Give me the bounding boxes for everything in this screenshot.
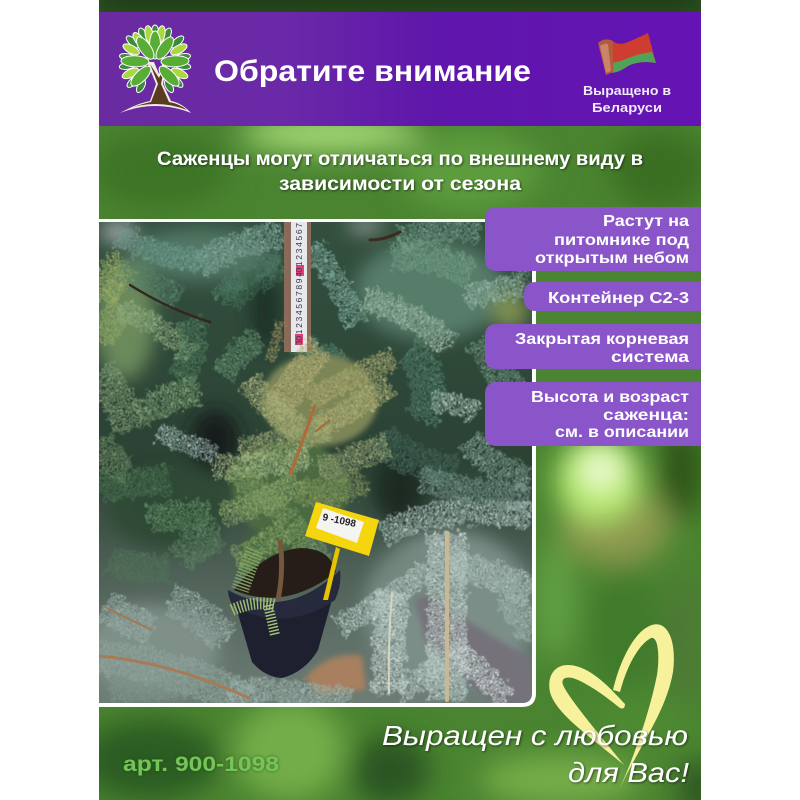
title: Обратите внимание — [214, 55, 531, 88]
branch stems — [99, 232, 447, 700]
slogan: Выращен с любовью — [382, 720, 688, 751]
thuja plant — [215, 320, 395, 583]
text: grown in Belarus: Беларуси — [592, 101, 662, 115]
log — [415, 597, 532, 703]
info card: container: Контейнер С2-3 — [548, 290, 689, 307]
info card: height and age — [485, 382, 701, 446]
lower fir branches — [99, 480, 532, 700]
text: grown in Belarus — [583, 84, 671, 115]
info card: closed root system: система — [611, 349, 689, 366]
slogan — [382, 720, 689, 788]
icon: Belarus flag — [598, 33, 656, 75]
info card: open-air nursery: открытым небом — [535, 250, 689, 267]
pot — [228, 540, 340, 678]
subtitle — [157, 148, 643, 195]
ruler — [284, 222, 311, 352]
upper fir branches — [99, 229, 530, 480]
photo frame — [99, 219, 536, 707]
yellow plant tag: 9 -1098 — [321, 512, 357, 530]
subtitle: зависимости от сезона — [279, 173, 521, 195]
text: grown in Belarus: Выращено в — [583, 84, 671, 98]
info card: open-air nursery — [485, 207, 701, 271]
article number: арт. 900-1098 — [123, 753, 279, 776]
info card: container — [524, 282, 701, 311]
info card: open-air nursery: Растут на — [603, 213, 689, 230]
slogan: для Вас! — [568, 757, 689, 788]
subtitle: Саженцы могут отличаться по внешнему виду в — [157, 148, 643, 170]
info card: closed root system — [485, 324, 701, 369]
fir branches — [99, 229, 532, 700]
info card: open-air nursery: питомнике под — [554, 232, 689, 249]
header band — [99, 12, 701, 126]
photo: thuja seedling in pot on fir branches — [80, 220, 535, 703]
info card: height and age: саженца: — [603, 407, 689, 424]
yellow plant tag — [305, 502, 379, 600]
info card: closed root system: Закрытая корневая — [515, 331, 689, 348]
info card: height and age: Высота и возраст — [531, 389, 689, 406]
logo: tree — [119, 25, 191, 113]
earth — [305, 655, 366, 694]
ruler: 30 1 2 3 4 5 6 7 8 9 40 1 2 3 4 5 6 7 — [294, 223, 304, 345]
info card: height and age: см. в описании — [555, 424, 689, 441]
icon: yellow heart — [549, 624, 674, 790]
